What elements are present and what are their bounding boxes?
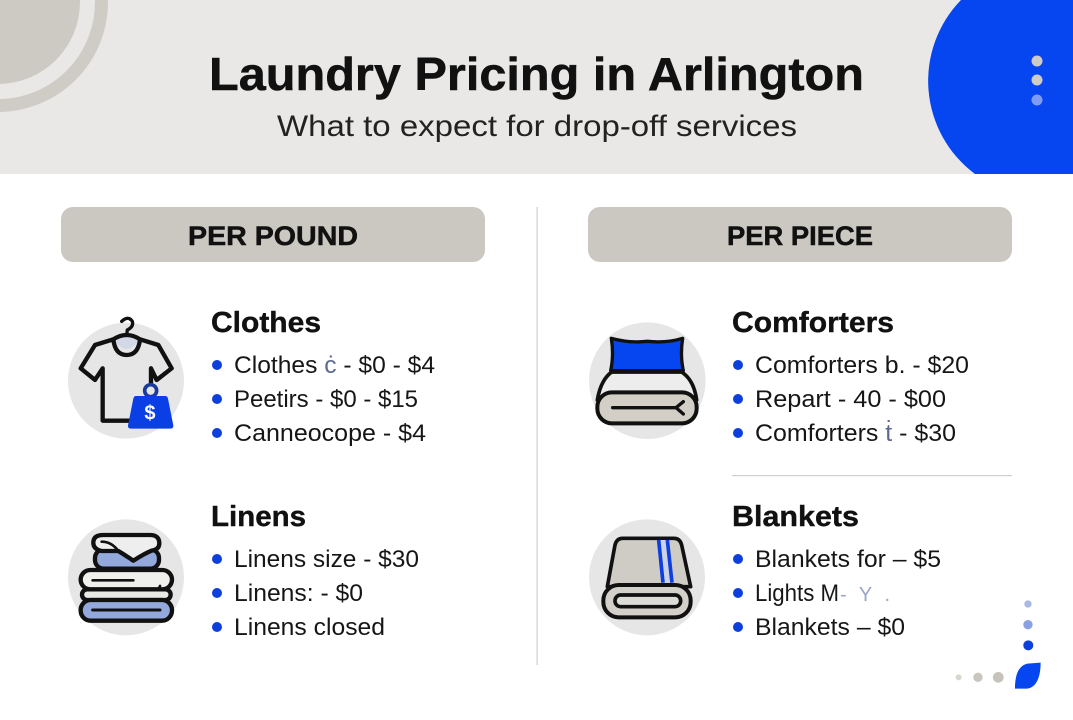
header band	[0, 0, 1073, 174]
text block: blankets: Blankets	[732, 501, 859, 533]
icon: stacked linens	[68, 519, 184, 635]
icon: t-shirt with price weight	[68, 318, 184, 439]
subtitle: What to expect for drop-off services	[277, 110, 797, 143]
text block: clothes: Clothes ċ - $0 - $4	[234, 352, 435, 379]
text block: linens: Linens closed	[234, 614, 385, 641]
text block: linens: Linens: - $0	[234, 580, 363, 607]
heading pill: per pound: PER POUND	[188, 221, 358, 251]
heading pill: per pound	[61, 207, 485, 262]
text block: linens: Linens size - $30	[234, 546, 419, 573]
heading pill: per piece: PER PIECE	[727, 221, 873, 251]
text block: comforters: Comforters ṫ - $30	[755, 420, 956, 447]
text block: blankets: Blankets for – $5	[755, 546, 941, 573]
panel: per pound	[61, 207, 485, 641]
text block: comforters: Repart - 40 - $00	[755, 386, 946, 413]
text block: clothes: Clothes	[211, 307, 321, 339]
text block: comforters: Comforters b. - $20	[755, 352, 969, 379]
icon: comforter with pillow	[589, 322, 706, 439]
icon: t-shirt with price weight: $	[144, 402, 156, 424]
text block: blankets: Blankets – $0	[755, 614, 905, 641]
decorative dots and leaf: bottom right	[956, 600, 1041, 689]
text block: clothes	[211, 307, 435, 447]
text block: clothes: Peetirs - $0 - $15	[234, 386, 418, 413]
heading pill: per piece	[588, 207, 1012, 262]
text block: blankets: - Y .	[840, 584, 890, 606]
text block: linens: Linens	[211, 501, 306, 533]
horizontal divider	[732, 475, 1012, 476]
panel: per piece	[588, 207, 1012, 641]
title: Laundry Pricing in Arlington	[209, 48, 864, 100]
vertical divider	[536, 207, 538, 665]
decorative circle: top left	[0, 0, 102, 106]
decorative circle: top right blue	[928, 0, 1073, 174]
text block: linens	[211, 501, 419, 641]
text block: blankets	[732, 501, 941, 641]
text block: comforters	[732, 307, 969, 447]
text block: blankets: Lights M	[755, 580, 839, 607]
icon: folded blanket	[589, 519, 705, 635]
text block: clothes: Canneocope - $4	[234, 420, 426, 447]
text block: comforters: Comforters	[732, 307, 894, 339]
